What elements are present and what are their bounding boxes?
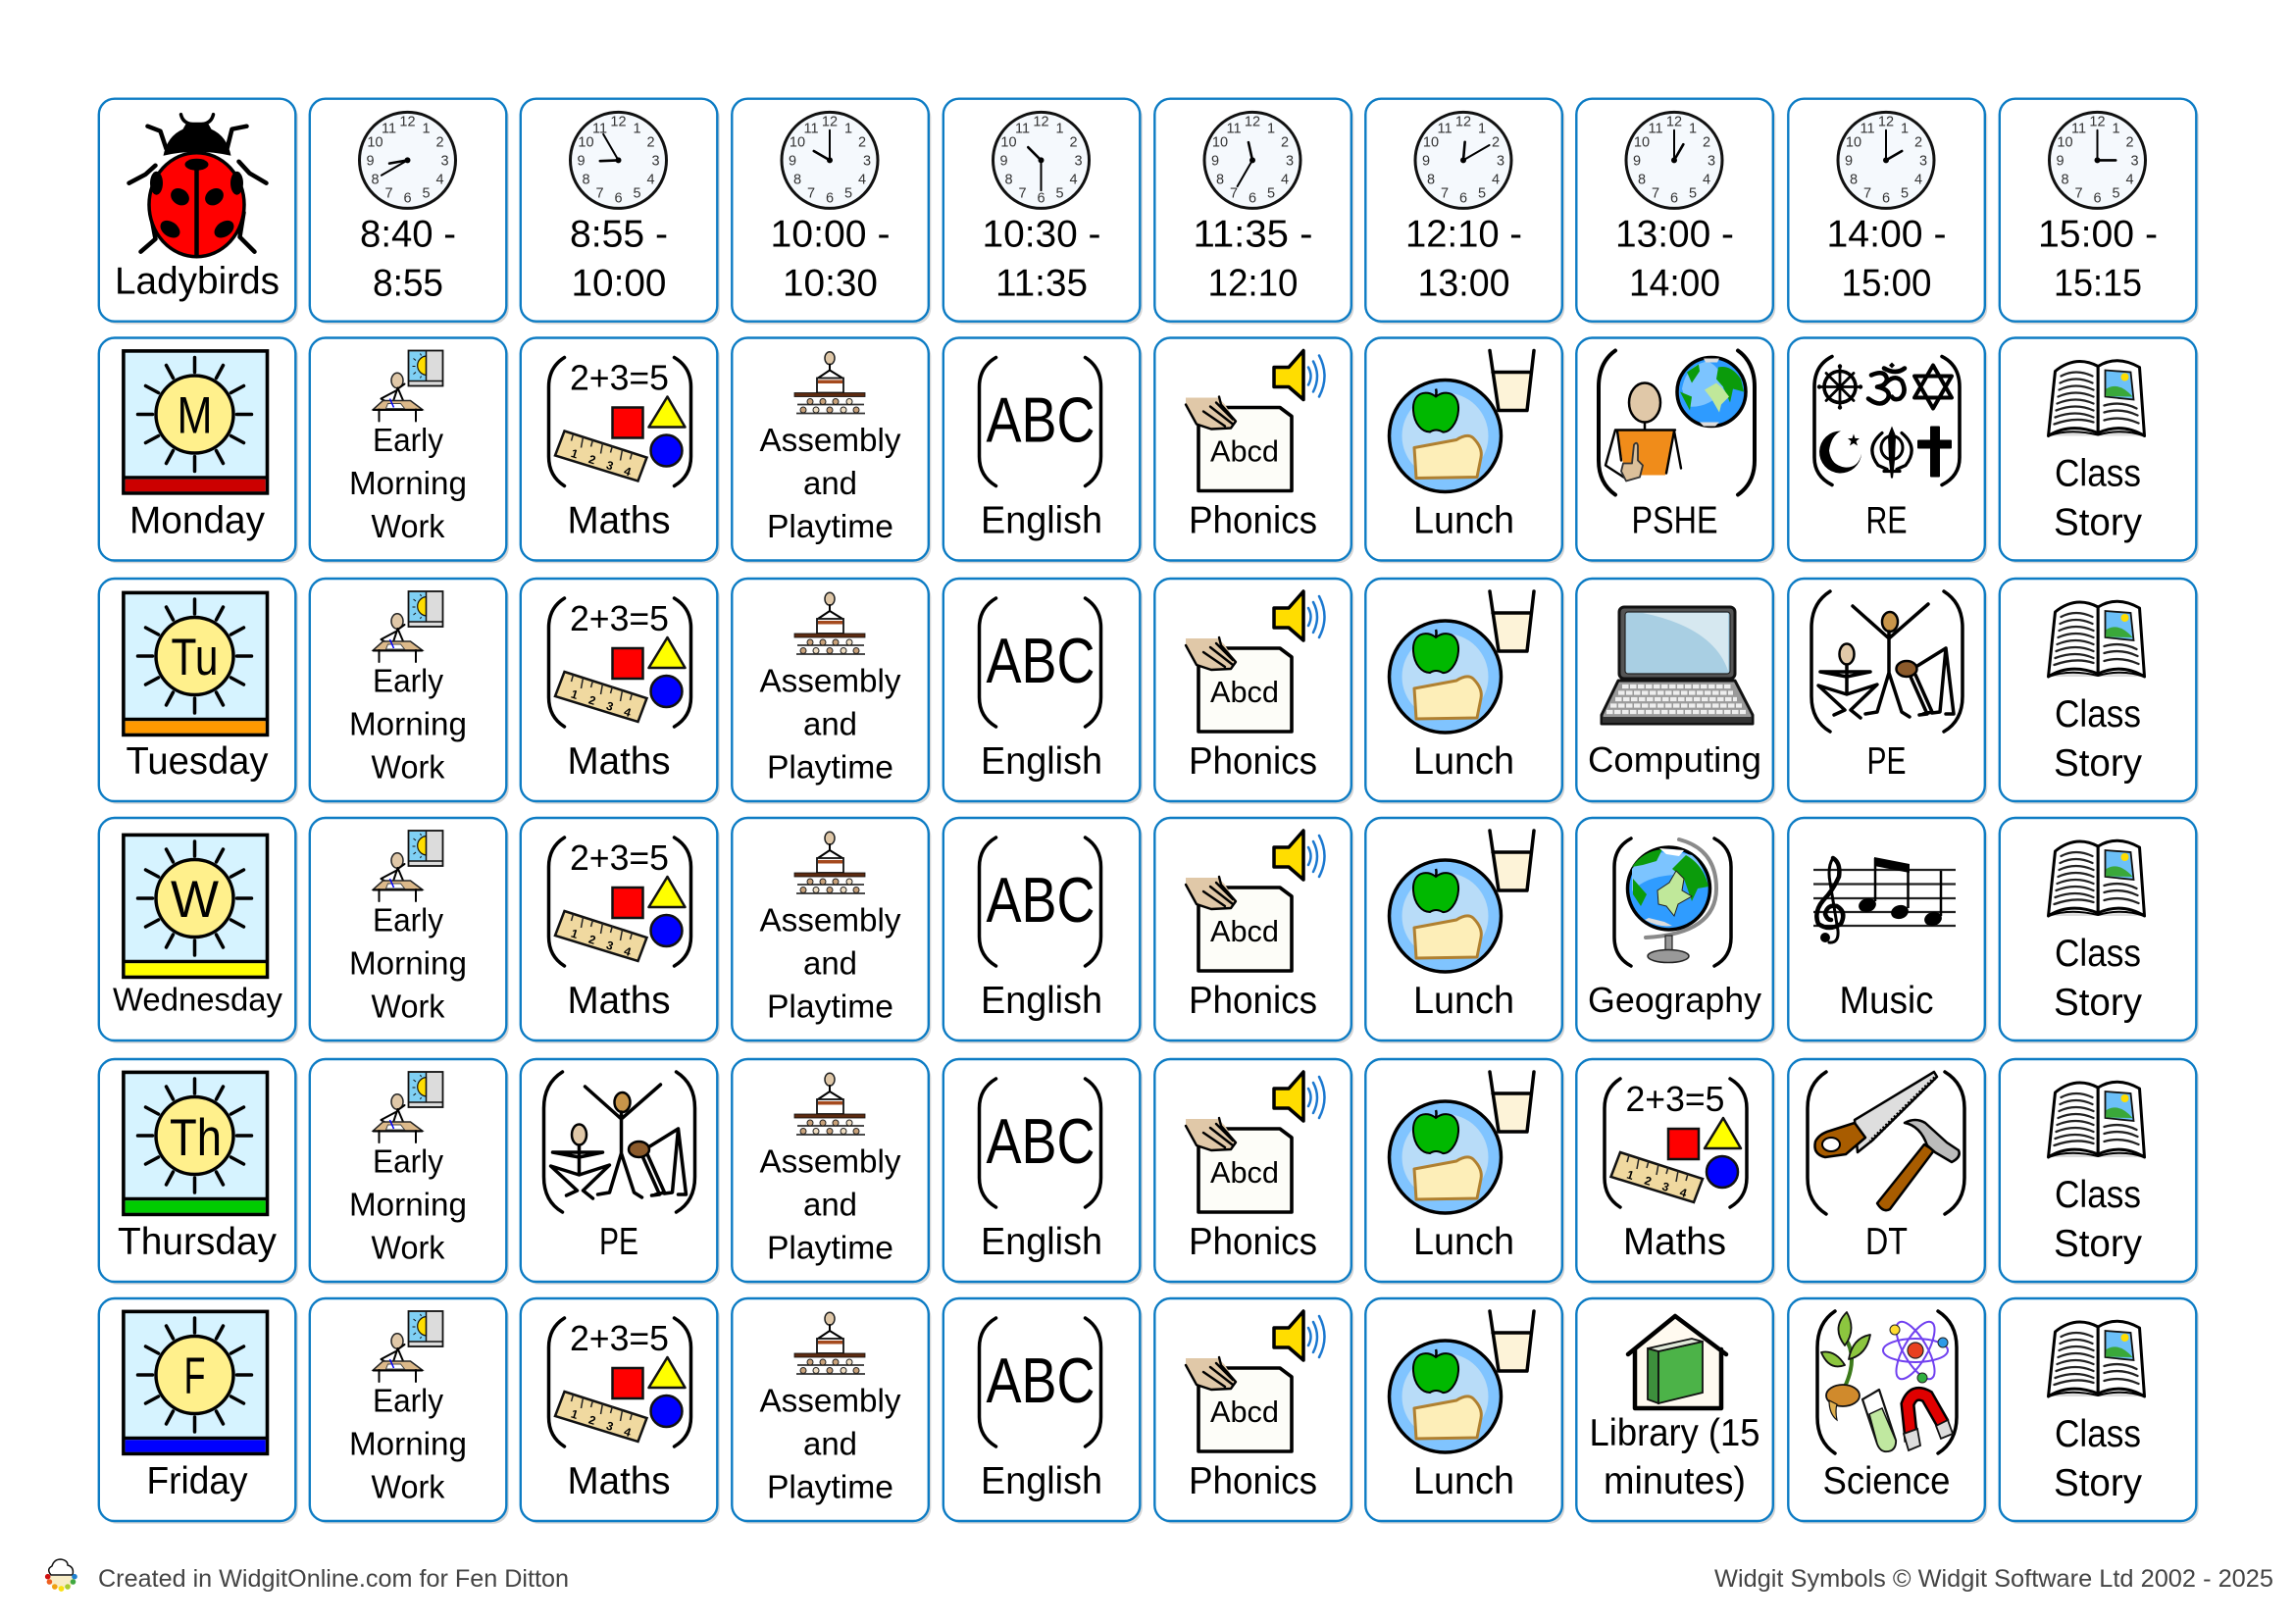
icon: phonics	[1186, 831, 1324, 971]
icon: phonics	[1186, 351, 1324, 490]
label: Early Morning Work	[349, 1143, 467, 1265]
card: time 13:00 - 14:00	[1576, 99, 1775, 324]
label: time: 15:00 -	[2038, 214, 2158, 256]
icon: PE figures	[1811, 591, 1963, 732]
card: English	[943, 1298, 1143, 1524]
label: Phonics: Phonics	[1189, 1221, 1317, 1263]
card: Assembly and Playtime	[732, 818, 931, 1043]
icon: Tuesday sun	[124, 592, 267, 735]
icon: globe	[1614, 838, 1731, 966]
label: PSHE: PSHE	[1632, 500, 1718, 541]
label: Early Morning Work: Morning	[349, 706, 467, 741]
label: Library (15 minutes): Library (15	[1589, 1412, 1759, 1454]
label: PE: PE	[599, 1221, 638, 1263]
icon: ABC	[979, 837, 1100, 966]
icon: maths	[549, 837, 690, 966]
icon: clock 10:00	[782, 112, 878, 208]
card: RE	[1788, 337, 1987, 563]
icon: Thursday sun: Th	[170, 1109, 222, 1167]
card: Tuesday	[99, 579, 298, 804]
icon: Friday sun: F	[184, 1347, 206, 1405]
label: Tuesday: Tuesday	[126, 740, 269, 783]
card: Lunch	[1365, 579, 1564, 804]
icon: Monday sun	[124, 351, 267, 493]
label: Assembly and Playtime	[759, 663, 901, 785]
icon: book	[2048, 361, 2144, 435]
icon: assembly	[794, 592, 865, 654]
label: Class Story: Class	[2055, 693, 2141, 736]
icon: clock 15:00	[2050, 112, 2146, 208]
icon: Friday sun	[124, 1311, 267, 1453]
label: Assembly and Playtime: and	[803, 706, 857, 741]
footer: created credit: Created in WidgitOnline.com for Fen Ditton	[98, 1565, 569, 1593]
icon: phonics	[1186, 1311, 1324, 1451]
label: Early Morning Work: Work	[371, 1469, 445, 1504]
icon: early morning work	[373, 1072, 443, 1142]
icon: clock 11:35	[1204, 112, 1300, 208]
icon: Thursday sun	[124, 1072, 267, 1214]
card: time 8:40 - 8:55	[310, 99, 509, 324]
label: Early Morning Work: Early	[373, 1143, 443, 1179]
card: Lunch	[1365, 818, 1564, 1043]
label: Assembly and Playtime: Assembly	[759, 663, 901, 698]
label: Class Story: Class	[2055, 453, 2141, 494]
label: Maths: Maths	[567, 740, 671, 783]
label: time: 14:00 -	[1826, 214, 1946, 256]
label: Class Story: Class	[2055, 1413, 2141, 1455]
label: Friday: Friday	[147, 1460, 248, 1502]
card: time 10:30 - 11:35	[943, 99, 1143, 324]
icon: ladybird	[129, 115, 267, 257]
icon: book	[2048, 601, 2144, 677]
icon: Wednesday sun: W	[171, 871, 219, 929]
label: Class Story: Story	[2054, 502, 2142, 543]
icon: book	[2048, 1082, 2144, 1157]
icon: Monday sun: M	[177, 386, 212, 445]
card: Early Morning Work	[310, 818, 509, 1043]
icon: lunch	[1389, 1311, 1534, 1452]
icon: book	[2048, 840, 2144, 916]
card: English	[943, 1059, 1143, 1285]
card: Early Morning Work	[310, 337, 509, 563]
card: Maths	[521, 818, 720, 1043]
label: Early Morning Work	[349, 1383, 467, 1504]
icon: PSHE	[1599, 351, 1755, 494]
label: Class Story	[2054, 1174, 2142, 1265]
label: time	[983, 214, 1100, 305]
label: Early Morning Work	[349, 422, 467, 544]
label: English: English	[981, 1221, 1102, 1263]
label: time: 10:30	[783, 263, 878, 305]
label: time: 8:40 -	[360, 214, 456, 256]
label: Assembly and Playtime	[759, 1383, 901, 1504]
label: Geography: Geography	[1588, 980, 1761, 1020]
card: Assembly and Playtime	[732, 579, 931, 804]
label: RE: RE	[1865, 500, 1907, 541]
icon: assembly	[794, 352, 865, 414]
icon: book	[2048, 1321, 2144, 1396]
label: Computing: Computing	[1588, 739, 1761, 780]
label: Assembly and Playtime: Assembly	[759, 422, 901, 458]
icon: lunch	[1389, 831, 1534, 972]
label: Assembly and Playtime	[759, 902, 901, 1024]
label: Class Story	[2054, 933, 2142, 1024]
label: Early Morning Work: Work	[371, 1230, 445, 1265]
card: Music	[1788, 818, 1987, 1043]
icon: lunch	[1389, 591, 1534, 733]
card: Early Morning Work	[310, 579, 509, 804]
card: Phonics	[1154, 1059, 1353, 1285]
card: Science	[1788, 1298, 1987, 1524]
label: Early Morning Work: Morning	[349, 1426, 467, 1461]
icon: maths	[549, 357, 690, 486]
label: Science: Science	[1822, 1460, 1950, 1502]
card: Phonics	[1154, 579, 1353, 804]
icon: phonics	[1186, 591, 1324, 732]
label: Thursday: Thursday	[118, 1221, 277, 1263]
label: Library (15 minutes): minutes)	[1604, 1460, 1746, 1502]
label: Maths: Maths	[567, 980, 671, 1022]
label: Maths: Maths	[1623, 1221, 1726, 1263]
card: Phonics	[1154, 337, 1353, 563]
card: Friday	[99, 1298, 298, 1524]
label: Lunch: Lunch	[1413, 1221, 1514, 1263]
label: Assembly and Playtime: Playtime	[767, 1230, 893, 1265]
icon: assembly	[794, 832, 865, 893]
card: PE	[1788, 579, 1987, 804]
icon: clock 14:00	[1838, 112, 1934, 208]
label: Class Story: Story	[2054, 742, 2142, 785]
label: Early Morning Work	[349, 902, 467, 1024]
label: time	[570, 214, 668, 305]
label: Class Story	[2054, 1413, 2142, 1504]
icon: laptop	[1602, 607, 1753, 724]
label: Class Story: Story	[2054, 1462, 2142, 1504]
icon: religions	[1814, 357, 1960, 484]
label: Assembly and Playtime: Assembly	[759, 902, 901, 938]
card: Geography	[1576, 818, 1775, 1043]
icon: phonics	[1186, 1072, 1324, 1212]
card: Lunch	[1365, 337, 1564, 563]
card: Maths	[521, 337, 720, 563]
label: Lunch: Lunch	[1413, 740, 1514, 783]
label: DT: DT	[1865, 1221, 1908, 1263]
card: PE	[521, 1059, 720, 1285]
card: Phonics	[1154, 1298, 1353, 1524]
card: DT	[1788, 1059, 1987, 1285]
icon: clock 8:40	[359, 112, 455, 208]
card: Ladybirds class title	[99, 99, 298, 324]
label: Assembly and Playtime: Playtime	[767, 989, 893, 1024]
label: Class Story	[2054, 693, 2142, 785]
card: Class Story	[2000, 337, 2199, 563]
card: Library (15 minutes)	[1576, 1298, 1775, 1524]
label: Early Morning Work	[349, 663, 467, 785]
label: Class Story	[2054, 453, 2142, 543]
card: Monday	[99, 337, 298, 563]
label: Early Morning Work: Work	[371, 508, 445, 544]
icon: ABC	[979, 1079, 1100, 1207]
label: Lunch: Lunch	[1413, 980, 1514, 1022]
label: Assembly and Playtime: Playtime	[767, 1469, 893, 1504]
icon: lunch	[1389, 351, 1534, 492]
label: Assembly and Playtime: Playtime	[767, 508, 893, 544]
label: Phonics: Phonics	[1189, 740, 1317, 783]
label: Class Story: Story	[2054, 1223, 2142, 1265]
icon: lunch	[1389, 1072, 1534, 1213]
label: time: 10:00	[571, 263, 667, 305]
icon: early morning work	[373, 351, 443, 422]
icon: maths	[549, 598, 690, 727]
icon: clock 8:55	[571, 112, 667, 208]
label: Early Morning Work: Early	[373, 902, 443, 938]
label: Assembly and Playtime: and	[803, 465, 857, 501]
icon: science	[1817, 1311, 1957, 1453]
icon: ABC	[979, 598, 1100, 727]
label: Assembly and Playtime: and	[803, 1426, 857, 1461]
icon: PE figures	[543, 1072, 694, 1212]
label: time	[1615, 214, 1734, 305]
card: Class Story	[2000, 1298, 2199, 1524]
label: English: English	[981, 500, 1102, 541]
label: Class Story: Story	[2054, 982, 2142, 1024]
card: Maths	[521, 579, 720, 804]
icon: early morning work	[373, 591, 443, 662]
label: Assembly and Playtime: and	[803, 1187, 857, 1222]
card: time 12:10 - 13:00	[1365, 99, 1564, 324]
card: English	[943, 818, 1143, 1043]
label: Early Morning Work: Early	[373, 1383, 443, 1418]
label: Class Story: Class	[2055, 1174, 2141, 1216]
label: Assembly and Playtime	[759, 422, 901, 544]
card: Class Story	[2000, 579, 2199, 804]
icon: early morning work	[373, 1311, 443, 1382]
label: Early Morning Work: Morning	[349, 945, 467, 981]
label: time	[771, 214, 891, 305]
label: Phonics: Phonics	[1189, 500, 1317, 541]
label: Phonics: Phonics	[1189, 980, 1317, 1022]
label: Early Morning Work: Early	[373, 422, 443, 458]
label: time	[360, 214, 456, 305]
label: English: English	[981, 980, 1102, 1022]
label: Music: Music	[1840, 980, 1934, 1022]
label: Assembly and Playtime: Playtime	[767, 749, 893, 785]
label: time: 11:35 -	[1193, 214, 1312, 256]
label: Assembly and Playtime: Assembly	[759, 1143, 901, 1179]
icon: assembly	[794, 1073, 865, 1135]
label: Monday: Monday	[129, 500, 265, 541]
label: time	[2038, 214, 2158, 305]
label: time: 11:35	[995, 263, 1088, 305]
footer: copyright: Widgit Symbols © Widgit Software Ltd 2002 - 2025	[1714, 1565, 2273, 1593]
icon: ABC	[979, 357, 1100, 486]
card: PSHE	[1576, 337, 1775, 563]
label: Early Morning Work: Work	[371, 749, 445, 785]
label: Library (15 minutes)	[1589, 1412, 1759, 1502]
card: Assembly and Playtime	[732, 1059, 931, 1285]
card: time 14:00 - 15:00	[1788, 99, 1987, 324]
card: Wednesday	[99, 818, 298, 1043]
label: time: 12:10	[1208, 263, 1299, 305]
label: English: English	[981, 740, 1102, 783]
label: time: 15:00	[1842, 263, 1932, 305]
label: English: English	[981, 1460, 1102, 1502]
icon: Tuesday sun: Tu	[171, 629, 218, 686]
label: Ladybirds: Ladybirds	[115, 261, 280, 303]
card: Class Story	[2000, 1059, 2199, 1285]
label: Assembly and Playtime: and	[803, 945, 857, 981]
label: Assembly and Playtime: Assembly	[759, 1383, 901, 1418]
label: Assembly and Playtime	[759, 1143, 901, 1265]
label: time: 14:00	[1629, 263, 1720, 305]
icon: clock 12:10	[1415, 112, 1511, 208]
label: Early Morning Work: Morning	[349, 465, 467, 501]
icon: Widgit logo	[45, 1559, 77, 1592]
label: time: 12:10 -	[1405, 214, 1522, 256]
label: time	[1826, 214, 1946, 305]
card: Assembly and Playtime	[732, 1298, 931, 1524]
card: time 10:00 - 10:30	[732, 99, 931, 324]
card: Early Morning Work	[310, 1298, 509, 1524]
card: Early Morning Work	[310, 1059, 509, 1285]
label: time: 15:15	[2054, 263, 2142, 305]
card: Computing	[1576, 579, 1775, 804]
icon: maths	[1605, 1079, 1747, 1207]
icon: early morning work	[373, 831, 443, 901]
card: Lunch	[1365, 1298, 1564, 1524]
label: time: 8:55	[373, 263, 443, 305]
label: Maths: Maths	[567, 500, 671, 541]
label: time: 13:00 -	[1615, 214, 1734, 256]
card: Maths	[521, 1298, 720, 1524]
label: Lunch: Lunch	[1413, 1460, 1514, 1502]
label: Wednesday: Wednesday	[113, 981, 282, 1018]
icon: ABC	[979, 1318, 1100, 1446]
icon: assembly	[794, 1312, 865, 1374]
label: Maths: Maths	[567, 1460, 671, 1502]
label: Early Morning Work: Morning	[349, 1187, 467, 1222]
card: Maths	[1576, 1059, 1775, 1285]
label: Phonics: Phonics	[1189, 1460, 1317, 1502]
label: time: 13:00	[1418, 263, 1510, 305]
card: time 11:35 - 12:10	[1154, 99, 1353, 324]
card: time 15:00 - 15:15	[2000, 99, 2199, 324]
card: Assembly and Playtime	[732, 337, 931, 563]
icon: maths	[549, 1318, 690, 1446]
card: time 8:55 - 10:00	[521, 99, 720, 324]
card: Phonics	[1154, 818, 1353, 1043]
card: Class Story	[2000, 818, 2199, 1043]
icon: clock 13:00	[1626, 112, 1722, 208]
card: English	[943, 579, 1143, 804]
label: time: 8:55 -	[570, 214, 668, 256]
card: English	[943, 337, 1143, 563]
icon: Wednesday sun	[124, 835, 267, 977]
label: Early Morning Work: Early	[373, 663, 443, 698]
icon: clock 10:30	[993, 112, 1089, 208]
icon: library	[1628, 1316, 1726, 1408]
label: Early Morning Work: Work	[371, 989, 445, 1024]
label: PE: PE	[1867, 740, 1907, 783]
label: Class Story: Class	[2055, 933, 2141, 975]
label: time: 10:00 -	[771, 214, 891, 256]
label: time	[1193, 214, 1312, 305]
card: Lunch	[1365, 1059, 1564, 1285]
icon: saw and hammer	[1808, 1072, 1964, 1214]
label: time	[1405, 214, 1522, 305]
label: Lunch: Lunch	[1413, 500, 1514, 541]
label: time: 10:30 -	[983, 214, 1100, 256]
icon: music notes	[1813, 857, 1956, 942]
card: Thursday	[99, 1059, 298, 1285]
